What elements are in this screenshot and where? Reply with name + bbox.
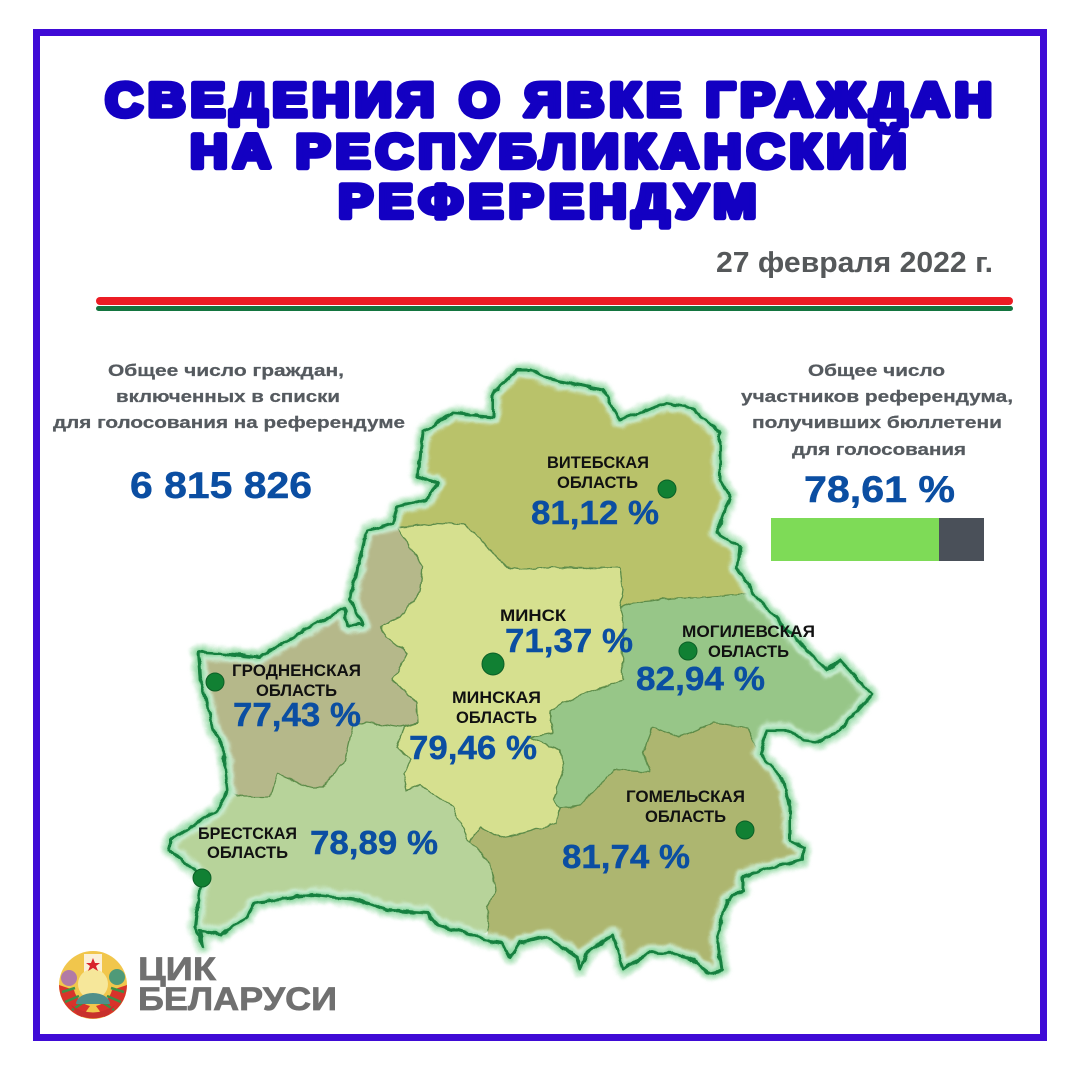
text block: participants: для голосования: [792, 441, 966, 459]
logo text: БЕЛАРУСИ: [138, 981, 337, 1017]
date: 27 февраля 2022 г.: [716, 247, 993, 279]
label: Gomel: 81,74 %: [562, 838, 690, 875]
title: РЕФЕРЕНДУМ: [338, 176, 756, 228]
label: Brest: ОБЛАСТЬ: [207, 844, 288, 862]
title: [105, 74, 992, 228]
text block: participants: получивших бюллетени: [752, 414, 1002, 432]
label: Brest: 78,89 %: [310, 824, 438, 861]
label: Minsk city: [500, 607, 633, 659]
label: Brest: [198, 824, 438, 862]
title: СВЕДЕНИЯ О ЯВКЕ ГРАЖДАН: [105, 74, 992, 126]
outline outer glow: [170, 370, 872, 973]
label: Vitebsk: ВИТЕБСКАЯ: [547, 454, 649, 472]
region: Minsk: [380, 523, 623, 843]
region: Mogilev: [530, 593, 872, 808]
icon: coat of arms: [59, 951, 127, 1019]
label: Mogilev: ОБЛАСТЬ: [708, 643, 789, 661]
label: Minsk city: 71,37 %: [505, 622, 633, 659]
label: Gomel: ГОМЕЛЬСКАЯ: [626, 788, 745, 806]
text block: participants: участников референдума,: [741, 388, 1013, 406]
title: НА РЕСПУБЛИКАНСКИЙ: [190, 124, 906, 178]
text block: total citizens: Общее число граждан,: [108, 362, 344, 380]
label: Grodno: ГРОДНЕНСКАЯ: [232, 662, 361, 680]
label: Gomel: ОБЛАСТЬ: [645, 808, 726, 826]
label: Grodno: 77,43 %: [233, 696, 361, 733]
label: Vitebsk: [531, 454, 659, 531]
label: Mogilev: МОГИЛЕВСКАЯ: [682, 623, 815, 641]
label: Grodno: ОБЛАСТЬ: [256, 682, 337, 700]
label: Vitebsk: 81,12 %: [531, 494, 659, 531]
region: Brest: [170, 722, 495, 935]
progress bar: [771, 518, 984, 561]
label: Vitebsk: ОБЛАСТЬ: [557, 474, 638, 492]
label: Mogilev: [636, 623, 815, 697]
label: Gomel: [562, 788, 745, 875]
logo text: ЦИК: [138, 951, 217, 987]
text block: total citizens: [53, 362, 405, 432]
logo text: [138, 951, 337, 1017]
region: Grodno: [198, 527, 423, 797]
city markers: [193, 480, 754, 887]
text block: participants: [741, 362, 1013, 459]
region: Gomel: [470, 723, 803, 973]
text block: total citizens: включенных в списки: [116, 388, 340, 406]
label: Minsk city: МИНСК: [500, 607, 567, 625]
label: Minsk region: [409, 689, 541, 766]
label: Mogilev: 82,94 %: [636, 660, 765, 697]
inner borders: [228, 523, 757, 932]
divider: flag colours: [96, 297, 1013, 311]
map of Belarus: [170, 370, 872, 973]
label: Grodno: [232, 662, 361, 733]
label: Brest: БРЕСТСКАЯ: [198, 825, 297, 843]
label: Minsk region: 79,46 %: [409, 729, 537, 766]
label: Minsk region: ОБЛАСТЬ: [456, 709, 537, 727]
total citizens number: 6 815 826: [130, 465, 312, 506]
text block: participants: Общее число: [808, 362, 945, 380]
region: Vitebsk: [393, 370, 753, 607]
outline inner glow: [170, 370, 872, 973]
label: Minsk region: МИНСКАЯ: [452, 689, 541, 707]
text block: total citizens: для голосования на референдуме: [53, 414, 405, 432]
outline: [170, 370, 872, 973]
participants percent: 78,61 %: [804, 469, 955, 510]
